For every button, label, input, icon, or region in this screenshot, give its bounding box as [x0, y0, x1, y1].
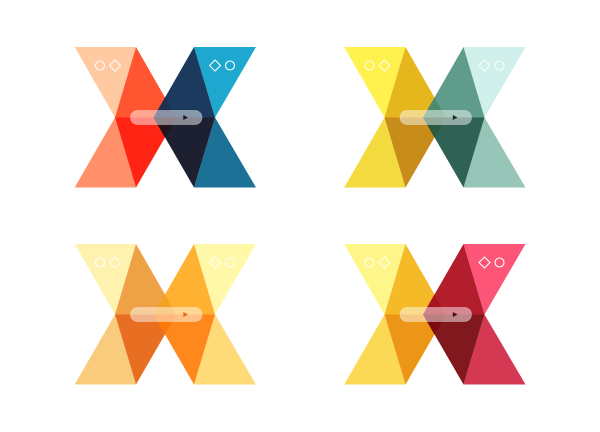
left half of X [75, 244, 176, 384]
glass pill button with arrow [130, 308, 202, 322]
icon: circle and diamond left [365, 257, 390, 268]
X graphic: pale yellow and orange [75, 244, 256, 384]
glass pill button with arrow [400, 308, 472, 322]
glass pill button with arrow [400, 110, 472, 124]
icon: diamond and circle right [479, 60, 504, 71]
icon: diamond and circle right [479, 257, 504, 268]
icon: diamond and circle right [210, 257, 234, 268]
right half of X [154, 244, 256, 384]
X graphic: yellow and teal [344, 47, 526, 188]
overlap lens [154, 98, 176, 138]
overlap lens [423, 294, 446, 334]
icon: circle and diamond left [365, 60, 390, 71]
icon: circle and diamond left [96, 257, 120, 268]
overlap lens [423, 98, 446, 138]
left half of X [344, 244, 446, 384]
left half of X [344, 47, 446, 188]
icon: circle and diamond left [96, 60, 120, 71]
left half of X [75, 47, 176, 188]
right half of X [423, 244, 526, 384]
right half of X [154, 47, 256, 188]
overlap lens [154, 294, 176, 334]
glass pill button with arrow [130, 110, 202, 124]
X graphic: red and navy [75, 47, 256, 188]
right half of X [423, 47, 526, 188]
X graphic: yellow and crimson [344, 244, 526, 384]
icon: diamond and circle right [210, 60, 234, 71]
